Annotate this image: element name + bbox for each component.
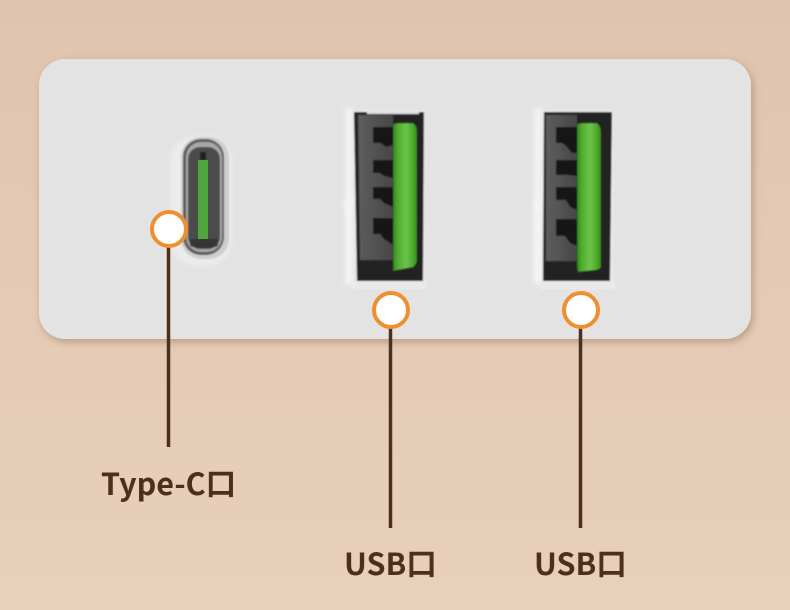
callout: USB left	[344, 293, 437, 584]
USB contacts	[373, 127, 393, 245]
USB contacts	[556, 127, 577, 246]
icon: USB port left	[345, 108, 426, 289]
callout: USB left: USB口	[344, 540, 437, 584]
panel: charger face	[39, 59, 751, 339]
icon: USB port right	[534, 108, 615, 289]
icon: Type-C port	[170, 136, 232, 266]
callout: Type-C	[101, 212, 236, 504]
callout: USB right	[534, 293, 627, 584]
callout: Type-C: Type-C口	[101, 460, 236, 504]
callout: USB right: USB口	[534, 540, 627, 584]
